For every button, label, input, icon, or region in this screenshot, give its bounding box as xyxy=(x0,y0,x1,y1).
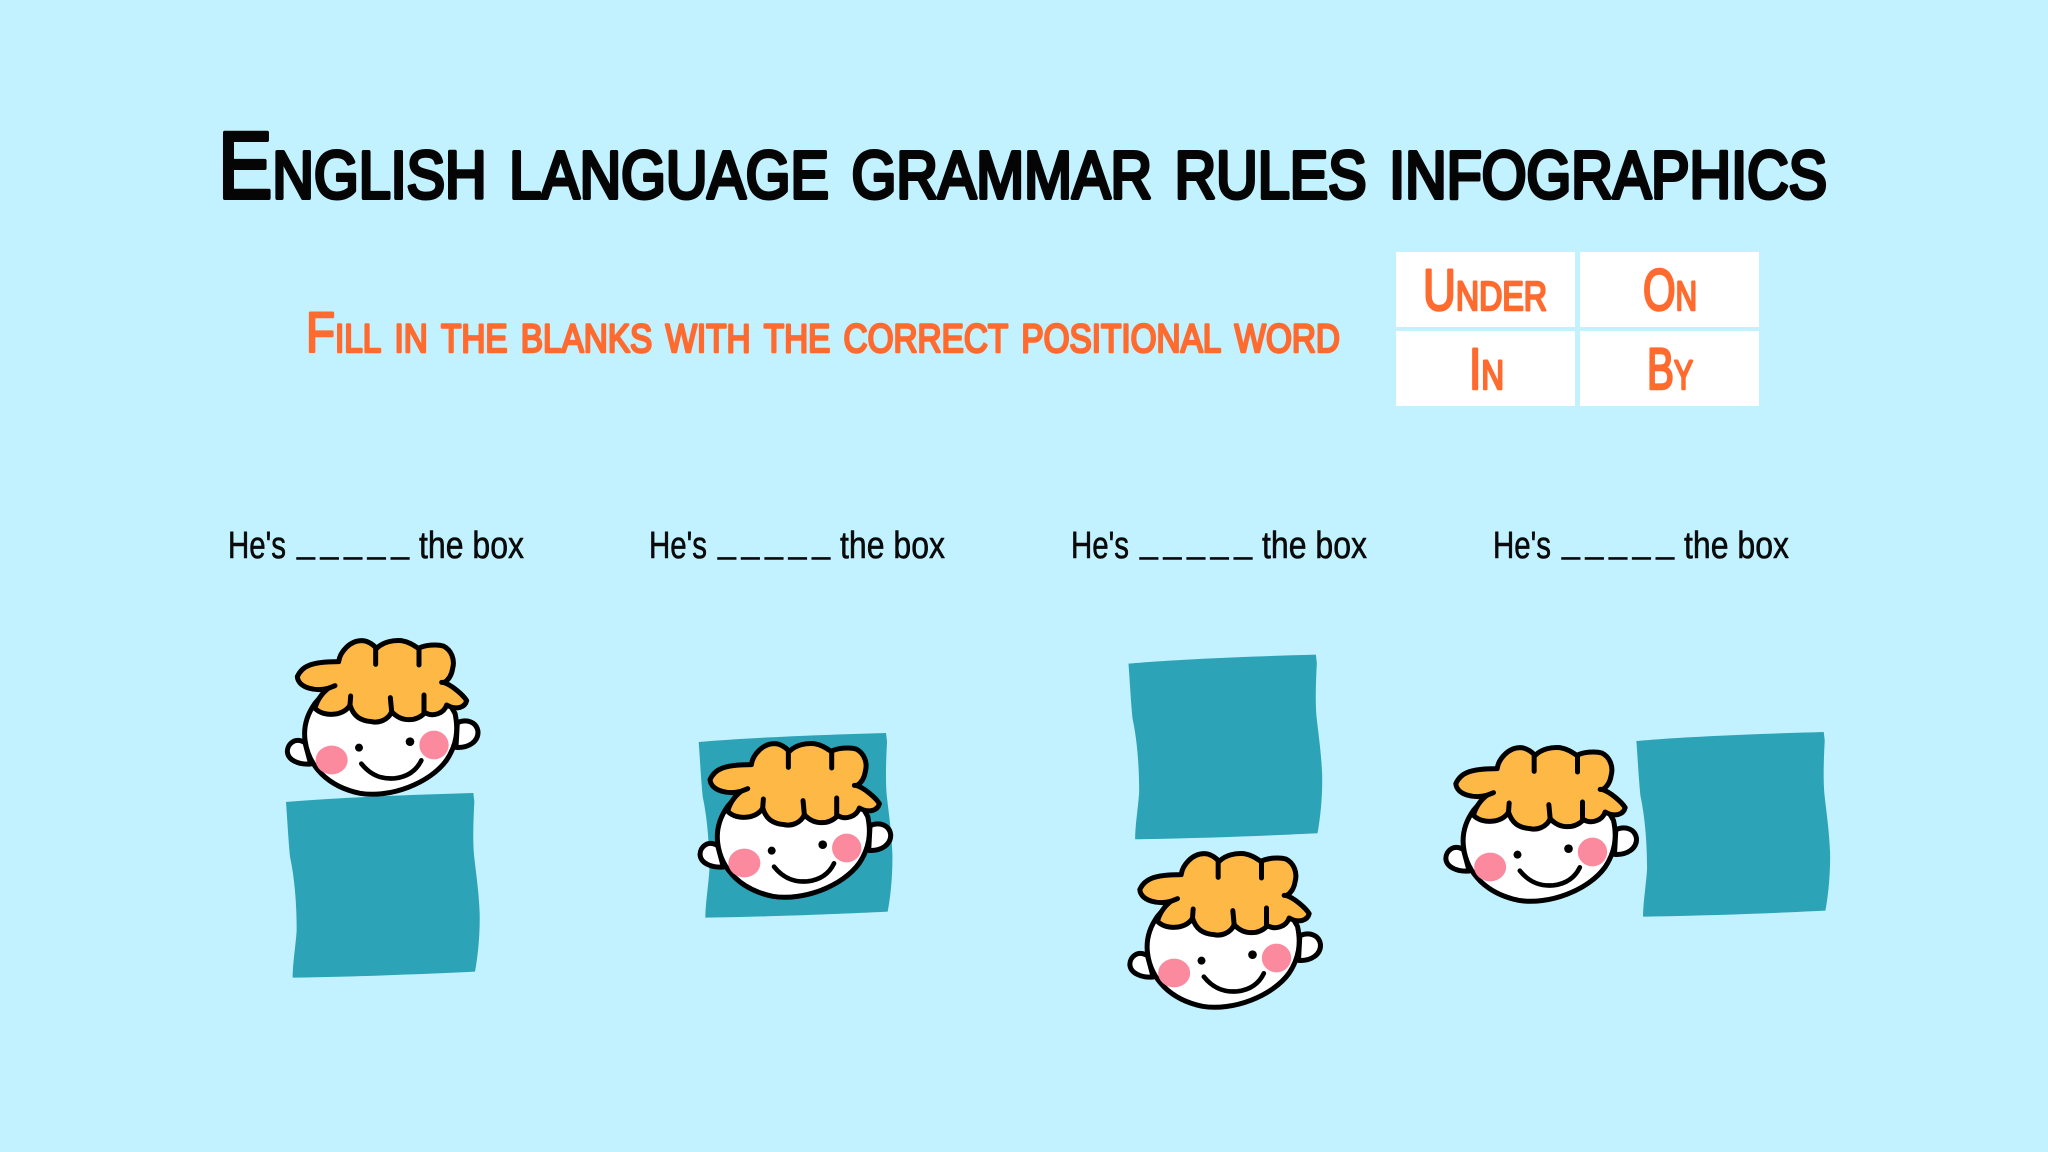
scene 3: boy under the box xyxy=(1128,655,1322,1007)
sentence 2: He's xyxy=(649,525,707,567)
sentence 2 xyxy=(649,524,945,567)
box xyxy=(1636,732,1830,917)
sentence 3: He's xyxy=(1071,525,1129,567)
sentence 4: _____ xyxy=(1561,524,1675,560)
instruction subtitle: Fill in the blanks with the correct positional word xyxy=(306,301,1340,365)
boy xyxy=(700,744,891,897)
sentence 4 xyxy=(1493,524,1789,567)
word cell: on xyxy=(1580,252,1759,327)
scene 4: boy by the box xyxy=(1446,732,1830,917)
sentence 4: the box xyxy=(1684,525,1789,567)
sentence 3: _____ xyxy=(1139,524,1253,560)
sentence 3 xyxy=(1071,524,1367,567)
sentence 2: _____ xyxy=(717,524,831,560)
title: English language grammar rules infographics xyxy=(218,113,1827,219)
word cell: in: In xyxy=(1469,337,1504,402)
boy xyxy=(1446,748,1637,901)
word cell: under: Under xyxy=(1423,258,1547,323)
box xyxy=(286,793,480,978)
sentence 1 xyxy=(228,524,524,567)
scene 1: boy on the box xyxy=(286,641,480,978)
word bank grid xyxy=(1396,252,1759,406)
word cell: by: By xyxy=(1647,337,1693,402)
sentence 2: the box xyxy=(840,525,945,567)
sentence 4: He's xyxy=(1493,525,1551,567)
box xyxy=(699,733,892,918)
scene 2: boy in the box xyxy=(699,733,892,918)
word cell: on: On xyxy=(1643,258,1697,323)
boy xyxy=(287,641,478,794)
sentence 3: the box xyxy=(1262,525,1367,567)
sentence 1: the box xyxy=(419,525,524,567)
word cell: in xyxy=(1396,331,1575,406)
boy xyxy=(1130,854,1321,1007)
word cell: by xyxy=(1580,331,1759,406)
box xyxy=(1128,655,1322,839)
sentence 1: He's xyxy=(228,525,286,567)
sentence 1: _____ xyxy=(296,524,410,560)
